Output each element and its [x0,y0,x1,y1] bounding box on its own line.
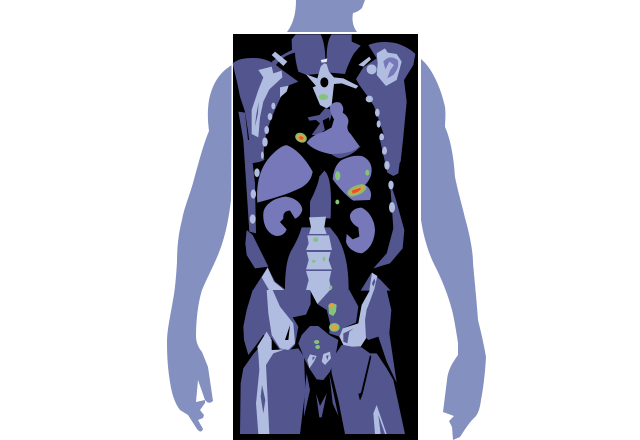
heart [307,102,359,154]
pelvis and femur bones [256,290,387,434]
chest and shoulder muscles [233,34,415,170]
bone marrow details [261,325,385,434]
aorta [310,171,331,218]
abdomen scan [243,139,404,291]
right kidney [263,197,302,236]
left kidney [346,208,375,253]
heart crescent [327,146,361,158]
bones of shoulder and ribs [252,48,402,169]
humerus hollow and throat cavity [255,57,398,127]
lesion: lung hot spot [294,131,308,144]
pelvis and thighs scan [240,290,405,434]
upper body scan [233,34,415,170]
rib bones [250,139,395,224]
liver [257,145,313,203]
body silhouette [167,0,486,440]
mediastinal gap [323,117,330,131]
iliac, pelvic and thigh muscles [240,290,405,434]
scan panel border [232,32,420,440]
side muscles and ribs [243,140,404,268]
mediastinal vessels [308,108,333,135]
spine vertebrae [306,217,332,290]
iliac crests [253,267,391,291]
lesion: sternum uptake [319,94,328,100]
neck and head base [287,0,365,32]
spine uptake spots [312,237,332,289]
abdominal uptake spots [335,170,369,204]
spleen and stomach [333,156,372,201]
left arm [167,65,232,432]
pelvic uptake spots [314,303,340,349]
right arm [421,59,486,440]
thigh cracks [358,355,371,401]
psoas muscles [285,227,349,290]
black scan panel [233,34,418,440]
